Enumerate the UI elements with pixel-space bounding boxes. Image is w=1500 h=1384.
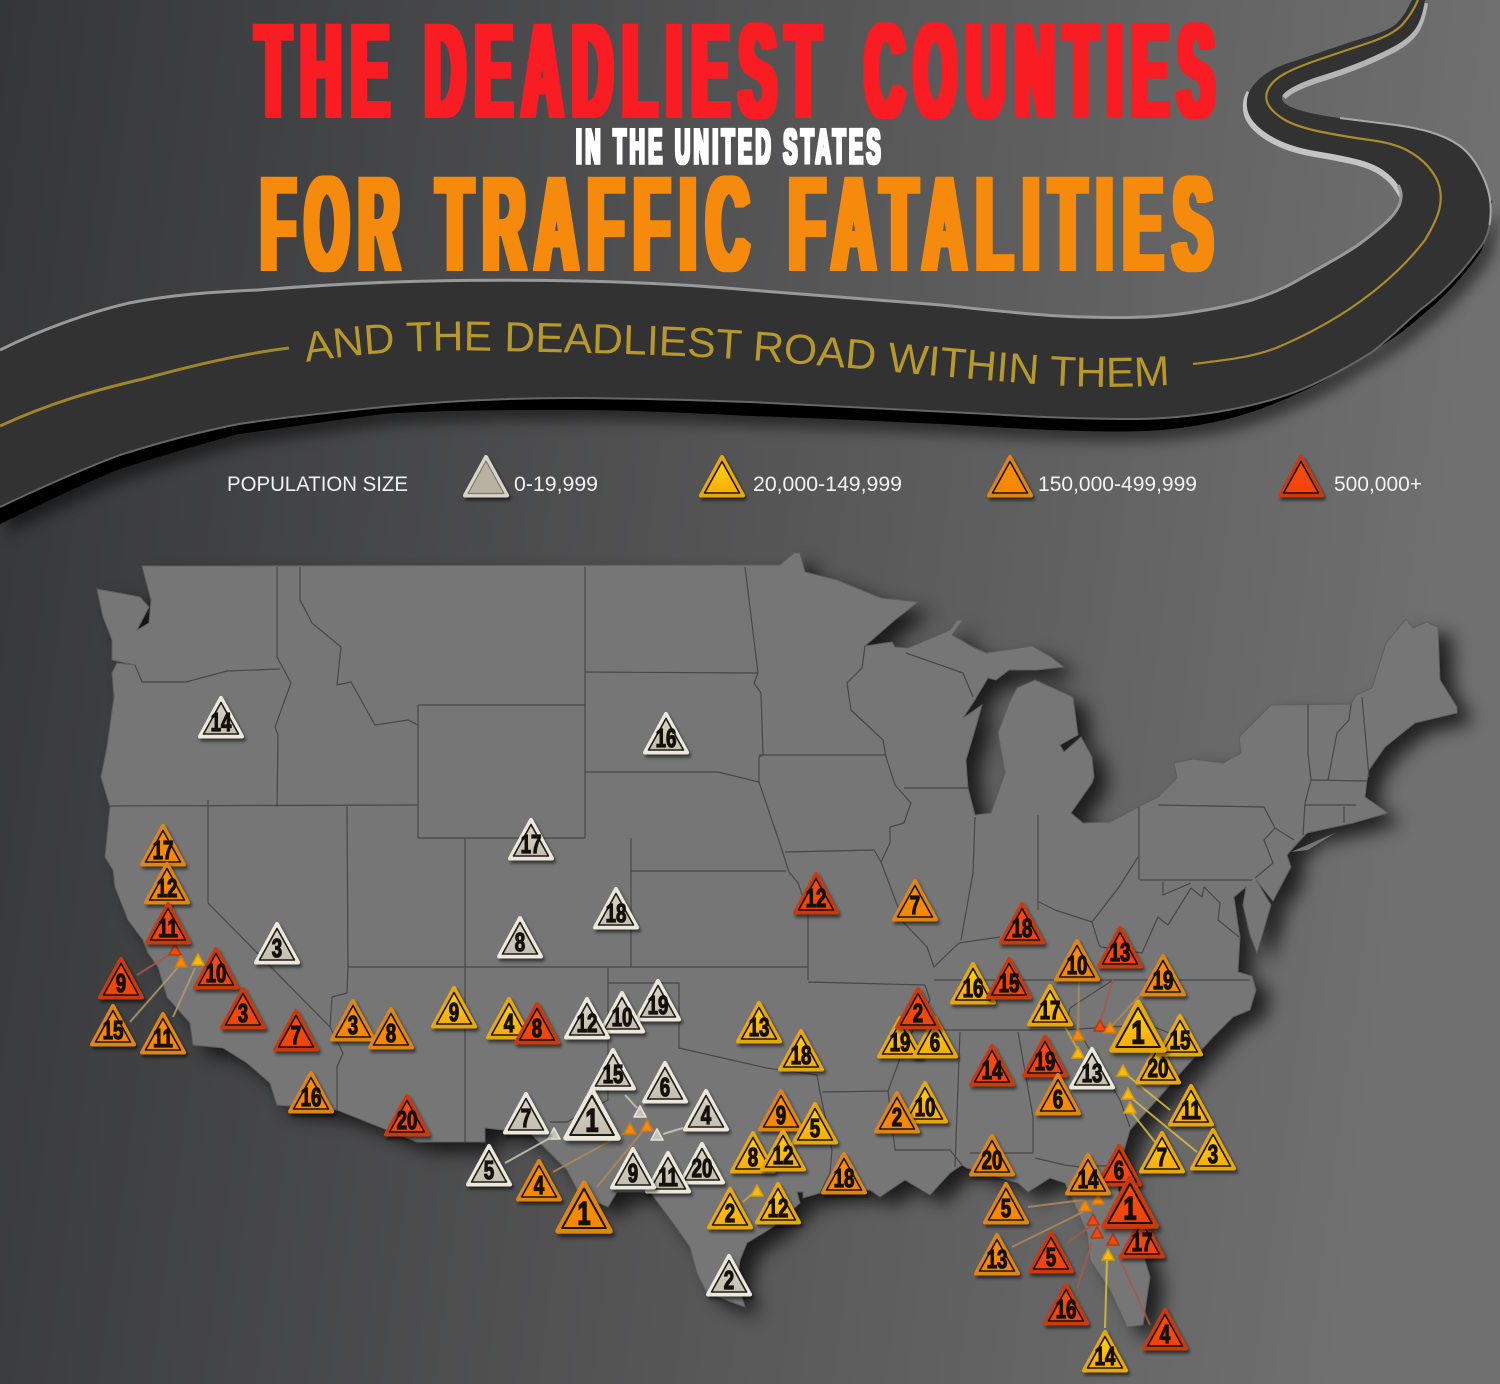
marker: grey 14 [200,698,242,737]
marker: grey 18 [595,889,637,928]
marker: yellow 6 [914,1018,956,1057]
marker: red 12 [795,874,837,913]
road shadow [8,210,1500,534]
marker: yellow 7 [1141,1133,1183,1172]
marker: grey 6 [644,1063,686,1102]
road surface [0,0,1491,507]
marker: yellow 11: 11 [1181,1095,1201,1125]
marker: orange 18: 18 [834,1163,854,1193]
marker: orange 1 (top rank) [558,1183,610,1231]
marker: red 18 [1001,904,1043,943]
land outline [97,553,1457,1327]
marker: grey 12 [566,999,608,1038]
marker: red 11 [147,904,189,943]
road centre line, right segment [1193,0,1441,364]
map shadow [111,563,1471,1337]
road inner light side, upper bend [1284,3,1425,97]
marker: yellow 7: 7 [1157,1142,1167,1172]
marker: grey 1 (top rank) [566,1090,618,1138]
marker: yellow 16: 16 [963,973,983,1003]
marker: grey 10 [601,993,643,1032]
marker: yellow 14: 14 [1095,1341,1116,1371]
legend item: 500,000+: 500,000+ [1334,473,1422,496]
legend: population size [227,457,1422,496]
marker: grey 7: 7 [521,1103,531,1133]
marker: orange 2 [876,1093,918,1132]
marker: yellow 4 [488,999,530,1038]
marker: grey 5 [468,1146,510,1185]
marker: red 2 [897,989,939,1028]
marker: yellow 17: 17 [1040,995,1060,1025]
marker: orange 19 [1142,956,1184,995]
marker: yellow 10 [904,1083,946,1122]
marker: grey 9 [612,1149,654,1188]
marker: grey 17 [510,820,552,859]
marker: orange 7: 7 [910,890,920,920]
connector lines [130,953,1197,1328]
marker: orange 12 [146,864,188,903]
marker: orange 11 [142,1014,184,1053]
state borders [110,567,1369,1193]
marker: yellow 8: 8 [748,1142,758,1172]
marker: orange 13: 13 [987,1244,1007,1274]
marker: grey 5: 5 [484,1155,494,1185]
marker: orange 6: 6 [1053,1084,1063,1114]
marker: orange 20 [971,1136,1013,1175]
marker: red 2: 2 [913,998,923,1028]
marker: grey 19 [637,981,679,1020]
marker: orange 8 [370,1009,412,1048]
marker: grey 11 [647,1153,689,1192]
marker: grey 20 [681,1144,723,1183]
marker: grey 11: 11 [658,1162,678,1192]
marker: orange 15 [92,1006,134,1045]
road graphic [0,0,1500,533]
marker: orange 18 [823,1154,865,1193]
marker: orange 19: 19 [1153,965,1173,995]
road black side wall [0,200,1492,524]
marker: yellow 8 [732,1133,774,1172]
road bottom edge line [0,225,1490,507]
marker: orange 10 [1056,941,1098,980]
marker: red 13: 13 [1110,937,1130,967]
marker: grey 15 [592,1050,634,1089]
marker: red 4: 4 [1160,1319,1171,1349]
marker: red 1 (top rank): 1 [1123,1189,1137,1226]
marker: red 5: 5 [1046,1242,1056,1272]
marker: yellow 12 [757,1184,799,1223]
marker: grey 3 [256,924,298,963]
marker: yellow 11 [1170,1086,1212,1125]
marker: red 20: 20 [397,1105,417,1135]
marker: orange 9 [760,1091,802,1130]
marker: grey 10: 10 [612,1002,632,1032]
marker: grey 4: 4 [701,1100,712,1130]
marker: orange 7 [894,881,936,920]
marker: grey 8: 8 [515,927,525,957]
Long Island [1291,833,1335,852]
marker: orange 3 [332,1001,374,1040]
marker: grey 2 [708,1256,750,1295]
marker: grey 9: 9 [628,1158,638,1188]
marker: grey 13: 13 [1082,1058,1102,1088]
marker: yellow 14 [1084,1332,1126,1371]
marker: yellow 12: 12 [773,1140,793,1170]
marker: orange 9: 9 [776,1100,786,1130]
small location markers [169,944,1136,1260]
marker: yellow 6: 6 [930,1027,940,1057]
marker: red 5 [1030,1233,1072,1272]
marker: yellow 2: 2 [725,1198,735,1228]
legend item: 20,000-149,999 [701,457,902,496]
marker: yellow 20: 20 [1148,1053,1168,1083]
marker: grey 15: 15 [603,1059,623,1089]
marker: red 10: 10 [206,958,226,988]
marker: orange 8: 8 [386,1018,396,1048]
marker: red 13 [1099,928,1141,967]
marker: yellow 5 [794,1104,836,1143]
marker: orange 17 [142,826,184,865]
marker: red 6 [1098,1146,1140,1185]
marker: red 8 [516,1004,558,1043]
marker: orange 12: 12 [157,873,177,903]
marker: grey 3: 3 [272,933,282,963]
marker: red 16 [1045,1285,1087,1324]
marker: red 7 [275,1011,317,1050]
numbered county markers [92,698,1234,1371]
marker: red 4 [1144,1310,1186,1349]
marker: yellow 5: 5 [810,1113,820,1143]
marker: yellow 4: 4 [504,1008,515,1038]
marker: grey 19: 19 [648,990,668,1020]
marker: red 3: 3 [238,998,248,1028]
marker: orange 5: 5 [1001,1193,1011,1223]
marker: orange 13 [976,1235,1018,1274]
road right edge line [1340,118,1491,225]
marker: grey 12: 12 [577,1008,597,1038]
road subtitle: AND THE DEADLIEST ROAD WITHIN THEM [306,322,1167,387]
marker: grey 7 [505,1094,547,1133]
marker: orange 16 [290,1073,332,1112]
marker: grey 16 [645,714,687,753]
marker: orange 10: 10 [1067,950,1087,980]
legend item: 150,000-499,999: 150,000-499,999 [1038,473,1197,496]
marker: orange 3: 3 [348,1010,358,1040]
marker: yellow 3 [1192,1130,1234,1169]
marker: grey 6: 6 [660,1072,670,1102]
marker: orange 11: 11 [153,1023,173,1053]
marker: yellow 18: 18 [791,1040,811,1070]
marker: orange 15: 15 [103,1015,123,1045]
marker: yellow 16 [952,964,994,1003]
road outer light side, upper bend [1246,92,1402,196]
title line 1: DEADLIEST [425,0,830,146]
title [256,0,1224,299]
marker: orange 14: 14 [1078,1164,1099,1194]
marker: grey 8 [499,918,541,957]
marker: red 3 [222,989,264,1028]
marker: red 19: 19 [1035,1046,1055,1076]
marker: red 9: 9 [116,968,126,998]
marker: grey 17: 17 [521,829,541,859]
marker: red 19 [1024,1037,1066,1076]
marker: yellow 10: 10 [915,1092,935,1122]
marker: yellow 18 [780,1031,822,1070]
marker: yellow 9: 9 [449,997,459,1027]
title line 1 [256,0,1224,146]
marker: red 11: 11 [158,913,178,943]
marker: orange 4 [518,1161,560,1200]
marker: yellow 19 [879,1018,921,1057]
marker: orange 6 [1037,1075,1079,1114]
marker: grey 20: 20 [692,1153,712,1183]
legend item: 150,000-499,999 [989,457,1197,496]
legend item: 500,000+ [1280,457,1422,496]
marker: red 1 (top rank) [1104,1178,1156,1226]
marker: yellow 1 (top rank): 1 [1131,1013,1145,1050]
marker: red 16: 16 [1056,1294,1076,1324]
marker: orange 14 [1067,1155,1109,1194]
marker: red 15 [988,959,1030,998]
marker: yellow 12: 12 [768,1193,788,1223]
marker: red 10 [195,949,237,988]
marker: yellow 1 (top rank) [1112,1002,1164,1050]
road centre line, left segment [0,348,289,426]
legend item: 0-19,999: 0-19,999 [514,473,598,496]
title: IN THE UNITED STATES [576,121,884,174]
marker: yellow 13: 13 [749,1012,769,1042]
marker: grey 2: 2 [724,1265,734,1295]
marker: grey 1 (top rank): 1 [585,1101,599,1138]
marker: grey 14: 14 [211,707,232,737]
marker: red 20 [386,1096,428,1135]
marker: yellow 15: 15 [1170,1025,1190,1055]
legend item: 20,000-149,999: 20,000-149,999 [753,473,902,496]
marker: grey 13 [1071,1049,1113,1088]
marker: grey 4 [685,1091,727,1130]
marker: red 18: 18 [1012,913,1032,943]
road top edge line [0,185,1401,350]
marker: yellow 19: 19 [890,1027,910,1057]
marker: red 8: 8 [532,1013,542,1043]
marker: yellow 2 [709,1189,751,1228]
marker: red 15: 15 [999,968,1019,998]
marker: yellow 9 [433,988,475,1027]
marker: red 17: 17 [1132,1227,1152,1257]
marker: red 14: 14 [982,1055,1003,1085]
marker: yellow 15 [1159,1016,1201,1055]
marker: red 14 [971,1046,1013,1085]
title line 1: THE [256,0,399,146]
marker: yellow 13 [738,1003,780,1042]
legend item: 0-19,999 [465,457,598,496]
marker: orange 2: 2 [892,1102,902,1132]
title line 3: TRAFFIC [437,150,759,299]
marker: red 6: 6 [1114,1155,1124,1185]
map of the United States [97,553,1471,1337]
marker: orange 1 (top rank): 1 [577,1194,591,1231]
marker: yellow 12 [762,1131,804,1170]
marker: yellow 17 [1029,986,1071,1025]
marker: orange 20: 20 [982,1145,1002,1175]
marker: red 7: 7 [291,1020,301,1050]
marker: red 9 [100,959,142,998]
marker: orange 5 [985,1184,1027,1223]
marker: grey 16: 16 [656,723,676,753]
marker: orange 4: 4 [534,1170,545,1200]
marker: grey 18: 18 [606,898,626,928]
title line 3: FOR [261,150,409,299]
marker: orange 17: 17 [153,835,173,865]
marker: red 12: 12 [806,883,826,913]
marker: orange 16: 16 [301,1082,321,1112]
marker: red 17 [1121,1218,1163,1257]
legend heading: POPULATION SIZE [227,473,408,496]
marker: yellow 3: 3 [1208,1139,1218,1169]
marker: yellow 20 [1137,1044,1179,1083]
